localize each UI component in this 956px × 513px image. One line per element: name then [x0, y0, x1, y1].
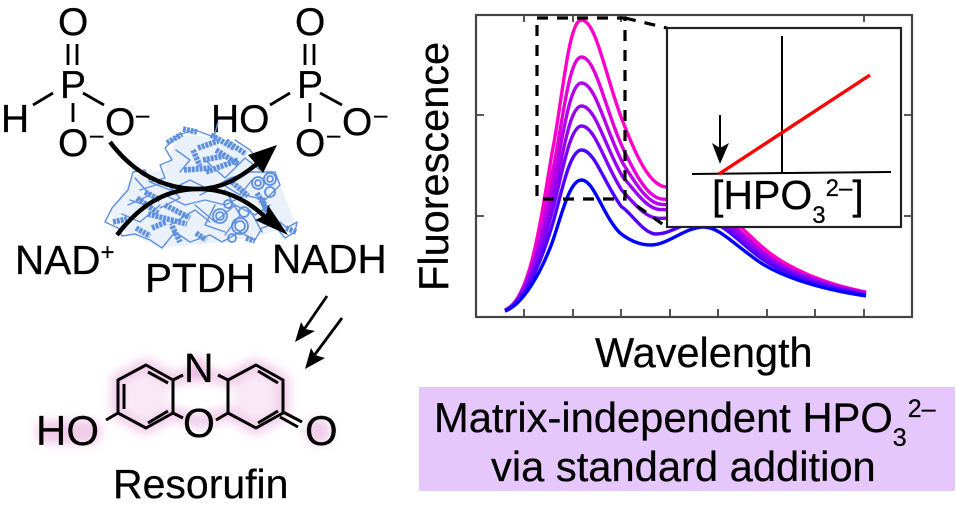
molecule: hypophosphite: –: [90, 122, 104, 149]
plot frame with ticks: [476, 15, 912, 317]
icon: PTDH protein ribbon structure: [105, 122, 297, 248]
molecule: hypophosphite: H: [1, 98, 29, 141]
inset x label: [HPO: [712, 172, 812, 218]
inset: standard addition plot: [667, 28, 901, 229]
x axis label: Wavelength: Wavelength: [595, 329, 813, 376]
molecule: hypophosphite: O: [58, 122, 88, 165]
callout: matrix-independent assay: 2–: [908, 395, 936, 423]
label: NADH: NADH: [272, 236, 387, 282]
arrow: x intercept: [712, 115, 729, 164]
inset axes: [692, 36, 891, 174]
label: PTDH: PTDH: [145, 255, 255, 301]
molecule: resorufin with pink glow: [36, 345, 338, 454]
callout: matrix-independent assay: Matrix-independent HPO: [434, 394, 893, 441]
y axis label: Fluorescence: Fluorescence: [410, 42, 457, 291]
molecule: resorufin with pink glow: O: [305, 407, 338, 454]
inset x label: ]: [852, 172, 864, 218]
molecule: hypophosphite: P: [60, 64, 86, 107]
molecule: phosphate: HO: [211, 98, 270, 141]
molecule: phosphate: –: [327, 122, 341, 149]
molecule: phosphate: O: [295, 122, 325, 165]
chart: fluorescence spectra: [476, 15, 912, 317]
inset x label: 2–: [826, 175, 853, 202]
callout: matrix-independent assay: 3: [893, 424, 907, 452]
molecule: resorufin with pink glow: O: [183, 400, 215, 446]
molecule: phosphate: O: [342, 101, 372, 144]
molecule: phosphate: [211, 1, 388, 165]
label: Resorufin: Resorufin: [113, 461, 288, 507]
arrow: phosphite to phosphate: [110, 142, 277, 189]
arrow: NAD+ to NADH: [117, 189, 288, 235]
emission curves, blue to magenta: [505, 20, 866, 311]
arrow: NADH to resorufin, second: [305, 318, 342, 369]
red calibration line: [719, 75, 870, 174]
dashed zoom box: [537, 18, 668, 228]
callout: matrix-independent assay: via standard addition: [491, 443, 876, 490]
molecule: hypophosphite: [1, 1, 150, 165]
label: NAD+: +: [101, 239, 115, 266]
molecule: phosphate: –: [374, 102, 388, 129]
molecule: phosphate: P: [297, 64, 323, 107]
arrow: NADH to resorufin, first: [295, 296, 327, 342]
molecule: hypophosphite: O: [105, 101, 135, 144]
inset x label: 3: [812, 202, 826, 229]
molecule: phosphate: O: [295, 1, 325, 44]
molecule: hypophosphite: –: [136, 102, 150, 129]
callout: matrix-independent assay: [419, 387, 955, 491]
molecule: resorufin with pink glow: HO: [36, 407, 99, 454]
molecule: hypophosphite: O: [58, 1, 88, 44]
label: NAD+: NAD: [15, 237, 101, 283]
molecule: resorufin with pink glow: N: [184, 345, 214, 391]
